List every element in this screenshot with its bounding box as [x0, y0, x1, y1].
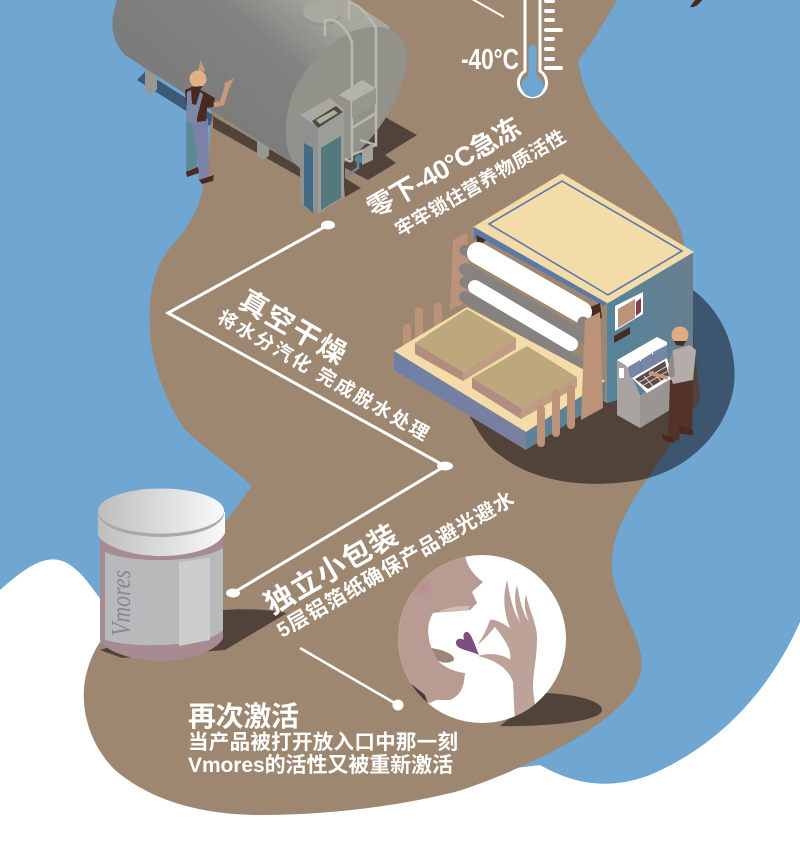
background: white wave [0, 559, 800, 861]
heading: small packaging: 独立小包装 [259, 518, 404, 621]
icon: vacuum drying machine [394, 174, 693, 450]
machine shadow on blue [470, 290, 735, 484]
label highlight [179, 558, 210, 646]
text block: reactivate: Vmores的活性又被重新激活 [188, 753, 453, 777]
valve pipe [345, 143, 373, 177]
blush [414, 578, 428, 594]
press table [394, 307, 605, 450]
inner shadow [431, 648, 454, 663]
jar lid [98, 512, 225, 556]
back post [450, 233, 470, 310]
front rail posts [541, 389, 571, 443]
connector line: reactivation [300, 648, 404, 710]
label: -40°C: -40°C [461, 44, 519, 76]
dark sleeve [411, 684, 428, 703]
text block: reactivate: 当产品被打开放入口中那一刻 [188, 731, 458, 754]
tank shadows [137, 72, 417, 197]
lip detail [440, 606, 470, 612]
heading: freeze: 零下-40°C急冻 [362, 112, 526, 224]
front post [581, 312, 603, 420]
machine roof [474, 174, 693, 303]
icon: control console [617, 337, 672, 428]
machine shadow on land [470, 331, 700, 484]
text block: reactivate [188, 731, 458, 777]
slab two [472, 346, 577, 419]
wall notice [614, 292, 643, 343]
control box [300, 98, 344, 214]
icon: operator [649, 326, 696, 442]
illustration: person tasting product [398, 555, 566, 723]
front frame [474, 227, 607, 306]
connector line: top fragment [472, 0, 504, 17]
brown land [84, 0, 700, 815]
subtext: freeze: 牢牢锁住营养物质活性 [391, 125, 570, 241]
subtext: vacuum drying: 将水分汽化 完成脱水处理 [214, 305, 433, 445]
ladder platform [339, 80, 376, 118]
heading: reactivate: 再次激活 [188, 701, 299, 732]
tiny brown fragment top right [690, 0, 703, 7]
face and neck [398, 556, 483, 704]
connector path [168, 220, 453, 598]
tank body [112, 0, 390, 167]
circle shadow [500, 693, 602, 726]
heart gummy [456, 632, 479, 655]
rollers [465, 250, 592, 367]
jar shadow [100, 609, 287, 658]
heading: vacuum drying: 真空干燥 [234, 284, 352, 370]
tank hatch [303, 1, 341, 26]
machine side wall [607, 252, 693, 403]
tank end cap [286, 27, 407, 171]
jar label [105, 548, 223, 645]
back rail posts [407, 307, 438, 350]
icon: product jar [98, 488, 287, 661]
icon: storage tank [112, 0, 417, 214]
tank ladder [325, 2, 376, 161]
roof inset [489, 181, 682, 295]
subtext: small packaging: 5层铝箔纸确保产品避光避水 [273, 487, 519, 642]
icon: thermometer [518, 0, 561, 97]
brand text: Vmores [106, 570, 136, 636]
tank legs [145, 66, 269, 160]
machine interior [474, 227, 607, 403]
slab one [415, 309, 516, 381]
icon: worker at tank [185, 63, 233, 184]
hand [477, 580, 537, 725]
jar body [100, 540, 223, 661]
